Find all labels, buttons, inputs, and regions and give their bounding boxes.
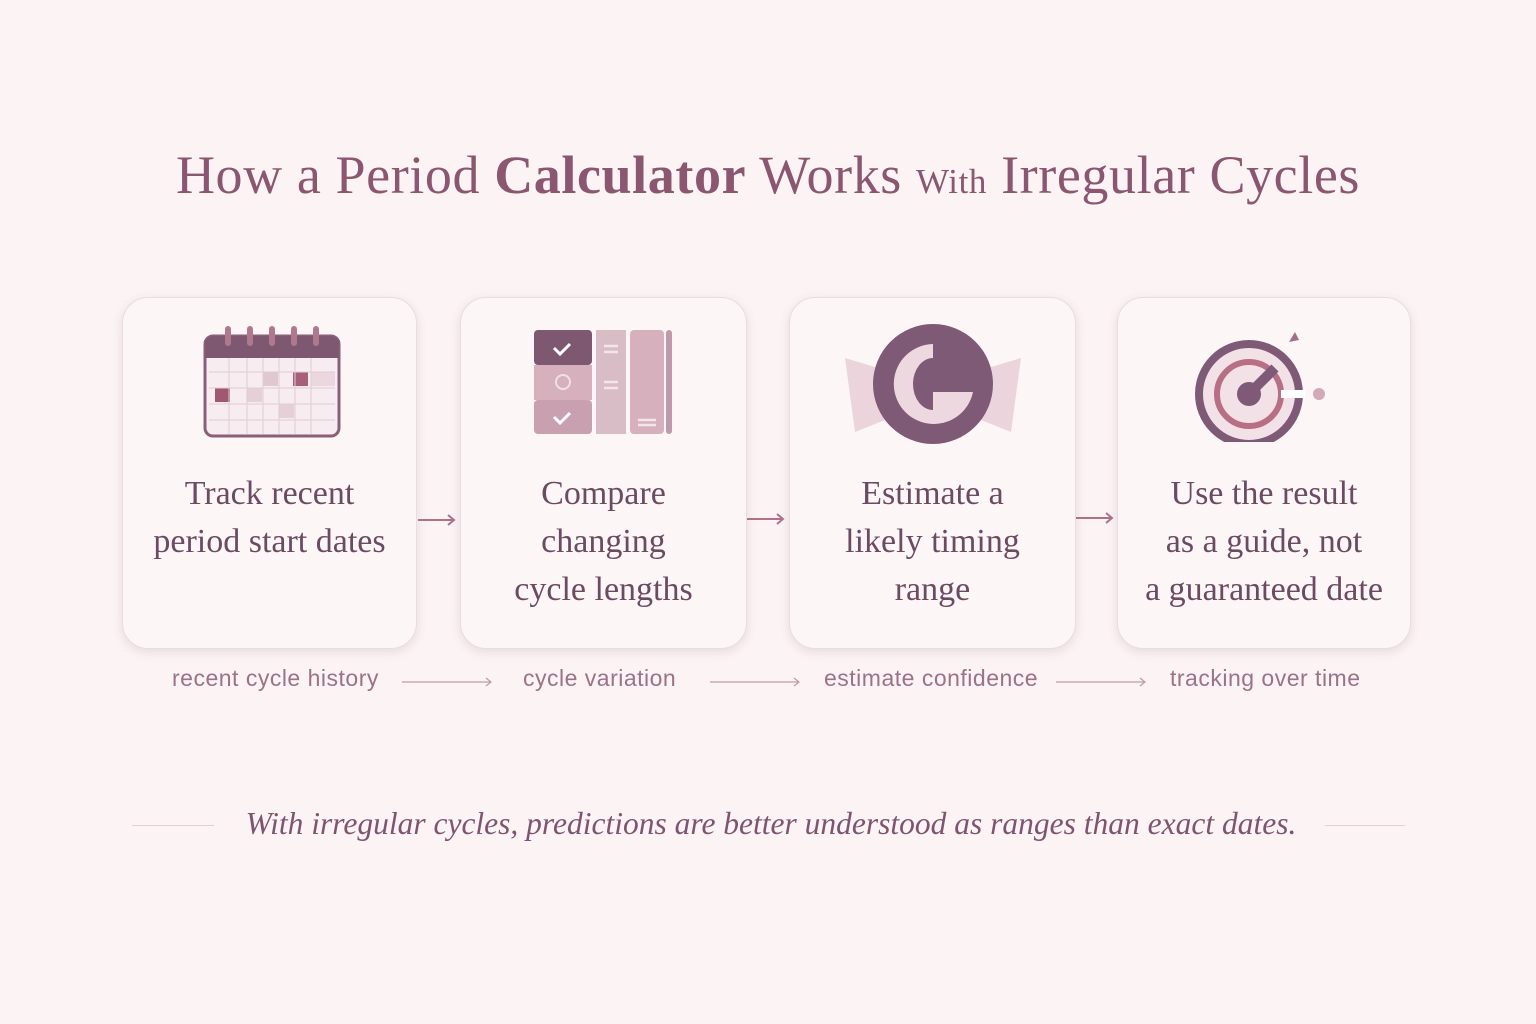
icon: calendar: [204, 326, 340, 438]
panel: use result: [1117, 297, 1411, 649]
text: estimate confidence: [824, 665, 1038, 691]
panel: compare: [460, 297, 747, 649]
icon: dial: [845, 324, 1021, 444]
text: [845, 475, 1020, 608]
text: range: [895, 571, 970, 608]
text: Estimate a: [861, 475, 1004, 512]
arrow 2: [747, 513, 784, 525]
panel: track: [122, 297, 417, 649]
text: changing: [541, 523, 666, 560]
text: cycle variation: [523, 665, 676, 691]
icon: comparison grid: [534, 330, 672, 434]
text: [514, 475, 693, 608]
text: as a guide, not: [1166, 523, 1362, 560]
text: tracking over time: [1170, 665, 1361, 691]
title: How a Period Calculator Works With Irregular Cycles: [176, 145, 1360, 205]
text: period start dates: [153, 523, 386, 560]
arrow 1: [418, 514, 456, 526]
text: Track recent: [185, 475, 354, 512]
text: [1145, 475, 1383, 608]
labels row: recent cycle history: [172, 665, 379, 691]
arrow 3: [1076, 512, 1114, 524]
text: Use the result: [1171, 475, 1357, 512]
footnote: With irregular cycles, predictions are better understood as ranges than exact dates.: [246, 806, 1296, 841]
panel: estimate: [789, 297, 1076, 649]
text: a guaranteed date: [1145, 571, 1383, 608]
text: [153, 475, 386, 560]
text: Compare: [541, 475, 666, 512]
text: likely timing: [845, 523, 1020, 560]
text: cycle lengths: [514, 571, 693, 608]
icon: target: [1195, 332, 1325, 442]
